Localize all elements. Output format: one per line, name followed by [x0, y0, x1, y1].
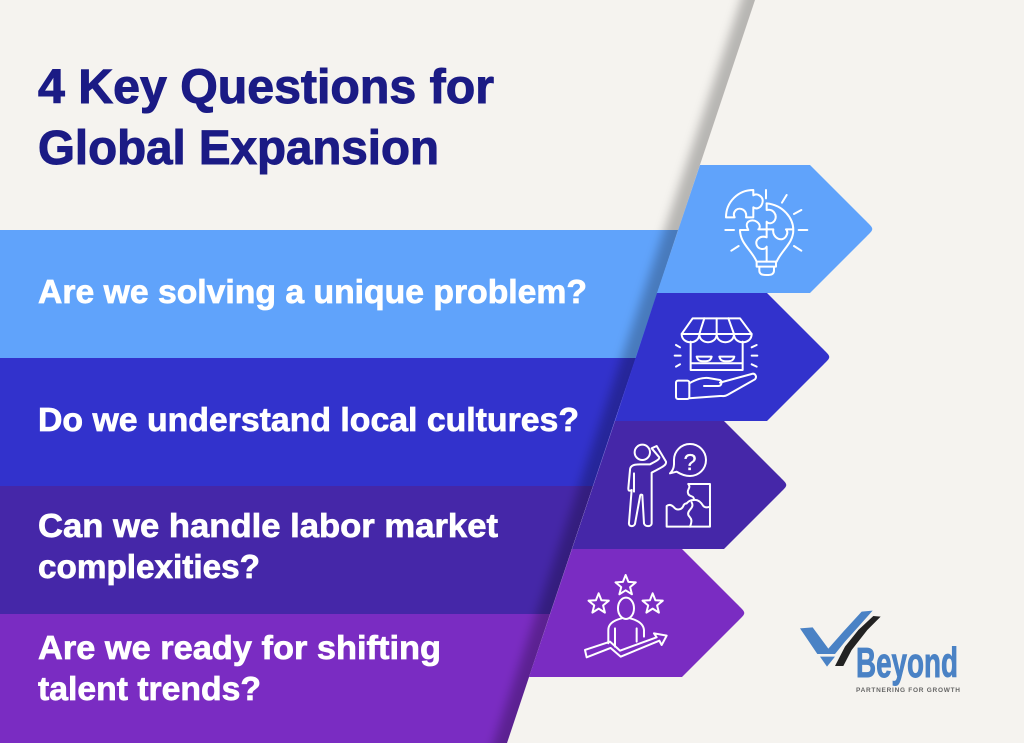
question 1: Are we solving a unique problem?: [38, 273, 587, 310]
question 4: Are we ready for shifting: [38, 629, 441, 666]
question 3: [38, 507, 498, 585]
icon: confused person with puzzle: ?: [683, 449, 696, 475]
diagonal fold shadow: [488, 0, 755, 743]
arrow tab 4: [529, 549, 744, 677]
title: [38, 61, 494, 175]
band: labor market: [0, 486, 593, 614]
question 3: complexities?: [38, 548, 260, 585]
logo: VBeyond: PARTNERING FOR GROWTH: [856, 687, 960, 694]
question 4: talent trends?: [38, 670, 261, 707]
icon: confused person with puzzle: [628, 444, 710, 527]
icon: shop on hand: [675, 318, 757, 399]
arrow tab 2: [615, 293, 829, 421]
logo check mark: [800, 611, 881, 667]
arrow tab 3: [572, 421, 786, 549]
question 2: Do we understand local cultures?: [38, 401, 579, 438]
question 3: Can we handle labor market: [38, 507, 498, 544]
band: unique problem: [0, 230, 678, 358]
icon: person with stars and rising arrow: [585, 575, 667, 657]
question 4: [38, 629, 441, 707]
title: 4 Key Questions for: [38, 61, 494, 114]
logo: VBeyond: Beyond: [856, 639, 958, 686]
title: Global Expansion: [38, 122, 439, 175]
band: talent trends: [0, 614, 550, 743]
arrow tab 1: [657, 165, 872, 293]
band: local cultures: [0, 358, 636, 486]
icon: puzzle light bulb: [725, 190, 807, 275]
logo: VBeyond: [800, 611, 960, 694]
